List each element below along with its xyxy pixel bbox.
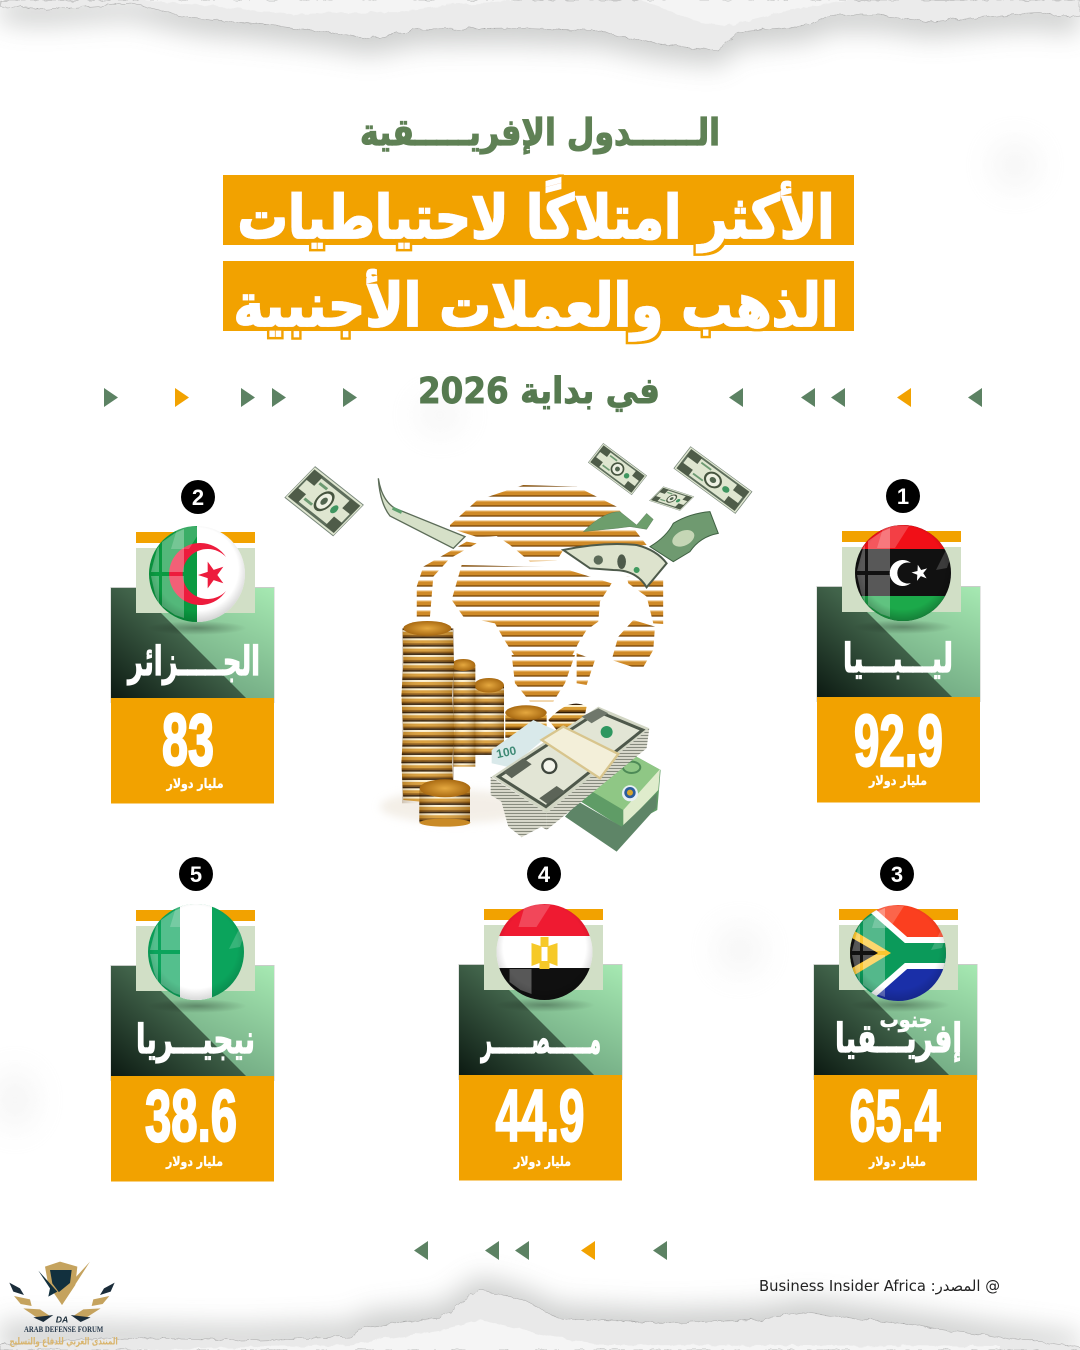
value: 65.4: [850, 1076, 941, 1157]
rank badge: [181, 480, 215, 514]
flag: Egypt: [494, 902, 594, 1002]
value: 38.6: [145, 1076, 237, 1157]
card 2: Algeria: [110, 480, 274, 804]
source credit: @ المصدر: Business Insider Africa: [759, 1277, 1000, 1295]
logo Arabic name: المنتدى العربي للدفاع والتسليح: [9, 1336, 118, 1347]
arrows: right row: [729, 388, 982, 407]
logo shield and wings: DA: [56, 1314, 68, 1324]
title: line 1: الــــــدول الإفريـــــقية: [360, 111, 720, 154]
rank badge: [179, 857, 213, 891]
logo: Arab Defense Forum: [9, 1262, 118, 1347]
card 3: South Africa: [814, 857, 978, 1180]
banknote bundles: 100: [495, 743, 518, 761]
rank badge: 5: [190, 862, 202, 887]
rank badge: 2: [192, 485, 204, 510]
flag: Libya: [853, 523, 953, 623]
country name: ليـــبـــيا: [843, 636, 953, 682]
flag: South Africa: [850, 905, 946, 1001]
rank badge: [880, 857, 914, 891]
torn paper: top: [0, 0, 1080, 66]
rank badge: [886, 479, 920, 513]
unit: مليار دولار: [868, 1155, 926, 1170]
country name: إفريـــقيا: [835, 1016, 962, 1062]
card 5: Nigeria: [110, 857, 274, 1182]
value: 83: [162, 700, 214, 781]
unit: مليار دولار: [166, 777, 224, 792]
value: 44.9: [496, 1076, 584, 1157]
country name: [835, 1008, 962, 1062]
headline bar 1: [223, 175, 854, 245]
headline line 2: الذهب والعملات الأجنبية: [234, 269, 838, 341]
logo English name: ARAB DEFENSE FORUM: [24, 1325, 104, 1334]
torn paper: bottom: [0, 1276, 1080, 1350]
card 1: Libya: [816, 479, 980, 802]
rank badge: 1: [897, 484, 909, 509]
arrows: left row: [104, 388, 357, 407]
unit: مليار دولار: [165, 1155, 223, 1170]
flying banknotes: [285, 443, 752, 587]
rank badge: [527, 857, 561, 891]
rank badge: 3: [891, 862, 903, 887]
coin stacks: [401, 621, 587, 827]
subtitle: في بداية 2026: [418, 371, 660, 412]
headline bar 2: [223, 261, 854, 331]
flag: Algeria: [147, 524, 247, 624]
decorative soft background blots: [0, 141, 1039, 1130]
arrows: bottom row: [414, 1241, 667, 1260]
country name: الجـــــزائر: [127, 639, 260, 685]
card 4: Egypt: مــــــصــــــر: [480, 1017, 601, 1063]
title: orange highlighted headline: [223, 175, 854, 341]
rank badge: 4: [538, 862, 551, 887]
value: 92.9: [854, 701, 943, 782]
headline line 1: الأكثر امتلاكًا لاحتياطيات: [238, 178, 834, 253]
banknote bundles: [491, 707, 661, 852]
flag: Nigeria: [146, 902, 246, 1002]
country name: نيجيـــريا: [136, 1017, 255, 1063]
central illustration: gold globe, coins and banknotes: [285, 443, 752, 852]
country name: جنوب: [880, 1008, 932, 1032]
globe: [413, 482, 667, 705]
unit: مليار دولار: [513, 1155, 571, 1170]
card 4: Egypt: [458, 857, 622, 1180]
coin stack shadow: [380, 790, 533, 823]
unit: مليار دولار: [868, 774, 927, 789]
